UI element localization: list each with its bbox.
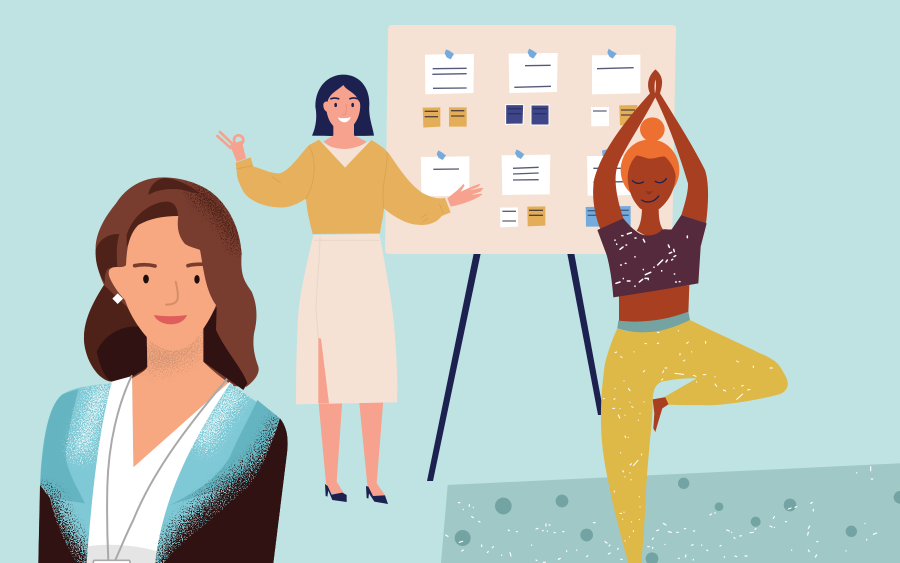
yoga woman xyxy=(593,69,708,333)
easel leg left xyxy=(427,252,481,481)
eyes xyxy=(143,275,200,284)
presenter woman xyxy=(217,75,483,404)
skirt seams xyxy=(314,237,379,338)
foot xyxy=(653,397,669,432)
floor dots xyxy=(455,478,900,563)
earring xyxy=(112,293,123,304)
presenter face xyxy=(323,85,360,130)
presenter eyes and brows xyxy=(330,98,358,107)
eyebrows xyxy=(135,264,207,266)
note 6 xyxy=(587,156,637,196)
presenter smile xyxy=(338,117,351,122)
floor mat xyxy=(441,463,900,563)
presenter legs and shoes xyxy=(318,400,388,504)
yoga leggings and foot xyxy=(601,320,788,563)
floor speckles xyxy=(446,467,877,562)
jacket left dark xyxy=(38,485,77,563)
face xyxy=(628,155,676,211)
shirt speckles xyxy=(615,233,687,286)
note 3 xyxy=(592,55,640,94)
neck xyxy=(637,207,663,238)
presenter legs xyxy=(318,400,386,496)
note 4 xyxy=(421,156,469,196)
presenter nose xyxy=(342,104,346,115)
smile xyxy=(642,196,659,202)
midriff xyxy=(619,285,689,322)
neck and chest xyxy=(132,327,229,467)
jacket right xyxy=(155,383,297,563)
jacket left speckle xyxy=(37,490,92,563)
badge xyxy=(93,560,130,563)
jacket right white speckle xyxy=(193,383,243,450)
presenter shoes xyxy=(325,484,388,504)
hair xyxy=(84,177,259,387)
jacket right speckle xyxy=(158,418,297,563)
navy stickies xyxy=(506,105,549,125)
blouse shadow xyxy=(85,545,158,563)
easel xyxy=(385,25,676,481)
hair bun xyxy=(640,117,665,141)
jacket left band xyxy=(40,389,85,503)
woman with badge xyxy=(37,177,297,563)
nose xyxy=(166,282,178,305)
jacket left white speckle xyxy=(72,382,113,457)
note 1 xyxy=(425,54,474,94)
jacket left xyxy=(37,382,113,563)
presenter neck xyxy=(323,117,367,157)
sweater seams xyxy=(237,146,443,222)
easel leg right xyxy=(567,252,604,415)
yellow stickies xyxy=(423,105,637,226)
jacket right dark xyxy=(163,418,288,563)
hair top shadow xyxy=(148,178,200,195)
note 2 xyxy=(509,53,558,93)
lips xyxy=(154,315,187,324)
jacket right band xyxy=(170,400,280,505)
nose xyxy=(645,191,653,194)
sticky lines xyxy=(425,110,635,215)
hair dark underlayer xyxy=(97,307,247,390)
leggings speckles xyxy=(603,331,772,541)
sweater xyxy=(236,140,451,234)
pins xyxy=(437,49,617,160)
presenter hair xyxy=(312,75,374,136)
presenter skirt xyxy=(296,234,397,404)
hair back xyxy=(621,139,679,201)
blouse xyxy=(85,376,233,563)
lanyard xyxy=(107,376,227,561)
hair speckled top right xyxy=(190,183,243,252)
eyes xyxy=(632,179,666,183)
skirt slit xyxy=(318,338,329,404)
notes on board xyxy=(421,49,640,227)
hair left lobe xyxy=(84,285,147,382)
board xyxy=(385,25,676,254)
hair side shadows xyxy=(96,234,119,283)
arms and hands xyxy=(593,69,708,230)
blue stickies xyxy=(586,206,631,227)
shirt xyxy=(597,215,707,297)
floor with dots and speckles xyxy=(441,463,900,563)
hand left xyxy=(217,132,246,162)
neck shadow xyxy=(145,330,205,370)
presenter collar xyxy=(319,140,371,168)
white stickies xyxy=(500,107,609,227)
leggings xyxy=(601,320,788,563)
waistband xyxy=(617,312,690,333)
face xyxy=(109,216,216,351)
note 5 xyxy=(502,155,550,195)
right hand xyxy=(447,184,483,207)
